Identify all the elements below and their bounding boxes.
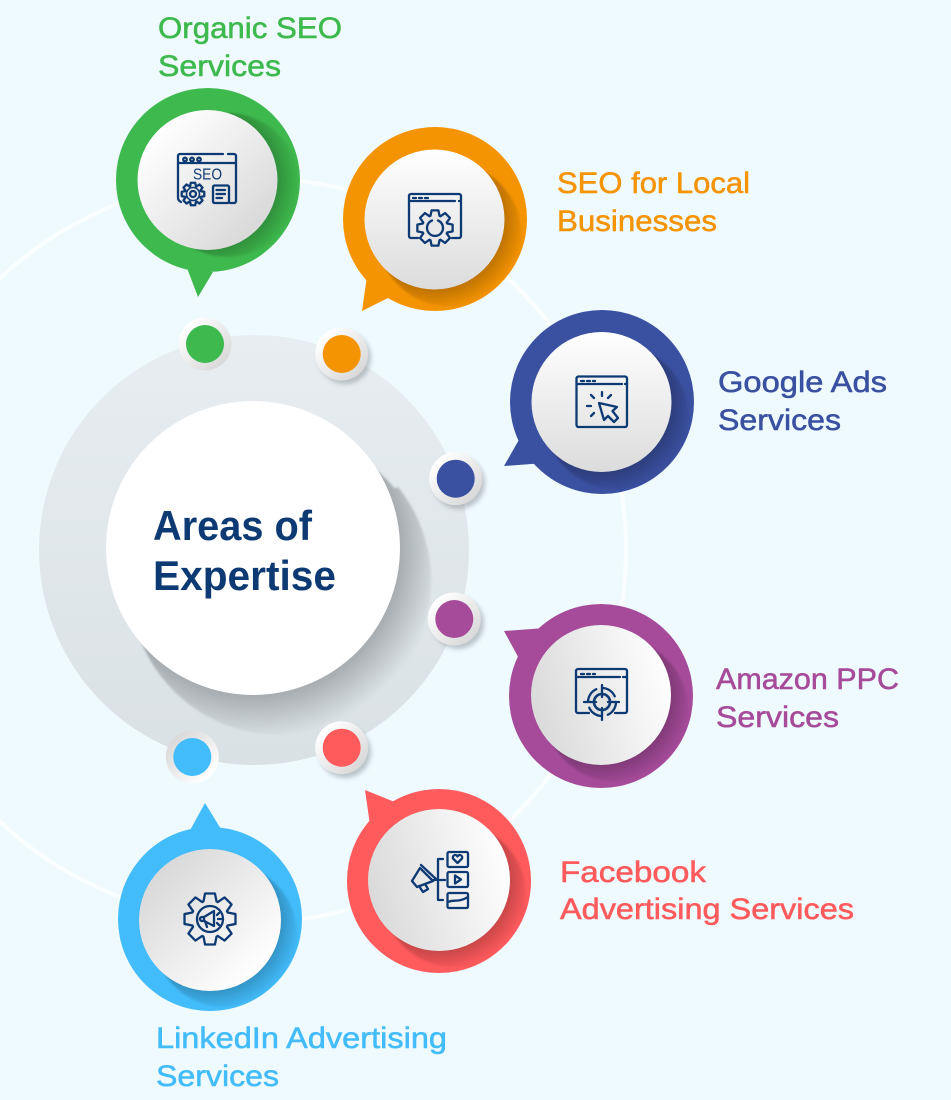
bubble: SEO for Local Businesses xyxy=(343,127,527,311)
title: Expertise xyxy=(153,552,336,599)
white centre disc xyxy=(106,401,400,695)
label: LinkedIn Advertising Services: Services xyxy=(156,1060,279,1093)
connector dot: red xyxy=(315,721,371,778)
bubble: LinkedIn Advertising Services xyxy=(118,803,302,1011)
label: Facebook Advertising Services: Facebook xyxy=(560,856,707,889)
icon: SEO window with gear: SEO xyxy=(193,166,222,184)
label: SEO for Local Businesses: SEO for Local xyxy=(557,167,750,200)
label: Google Ads Services: Services xyxy=(718,404,841,437)
hub long shadow xyxy=(130,435,431,735)
icon: megaphone with media cards xyxy=(412,852,468,908)
title: Areas of xyxy=(153,502,313,549)
icon: SEO window with gear xyxy=(178,154,236,205)
connector dot: blue xyxy=(429,452,485,509)
label: SEO for Local Businesses: Businesses xyxy=(557,205,717,238)
bubble: Organic SEO xyxy=(116,88,300,297)
label: Facebook Advertising Services: Advertising Services xyxy=(560,893,854,926)
label: Organic SEO: Services xyxy=(158,50,281,83)
connector dot: green xyxy=(178,318,232,370)
label: Organic SEO: Organic SEO xyxy=(158,12,342,45)
label: Amazon PPC Services: Amazon PPC xyxy=(716,663,899,696)
centre hub xyxy=(39,335,469,765)
bubble: Amazon PPC Services xyxy=(504,604,693,788)
connector dot: purple xyxy=(428,592,484,649)
label: Google Ads Services: Google Ads xyxy=(718,366,887,399)
icon: gear with megaphone xyxy=(185,894,235,944)
icon: window with gear xyxy=(409,194,461,246)
icon: window with target xyxy=(576,669,627,720)
bubble: Google Ads Services xyxy=(504,310,694,494)
label: LinkedIn Advertising Services: LinkedIn Advertising xyxy=(156,1022,447,1055)
connector dot: orange xyxy=(315,328,371,384)
label: Amazon PPC Services: Services xyxy=(716,701,839,734)
connector dot: sky blue xyxy=(166,730,219,784)
bubble: Facebook Advertising Services xyxy=(347,789,531,973)
outer grey ring xyxy=(39,335,469,765)
icon: window with cursor xyxy=(576,376,627,427)
